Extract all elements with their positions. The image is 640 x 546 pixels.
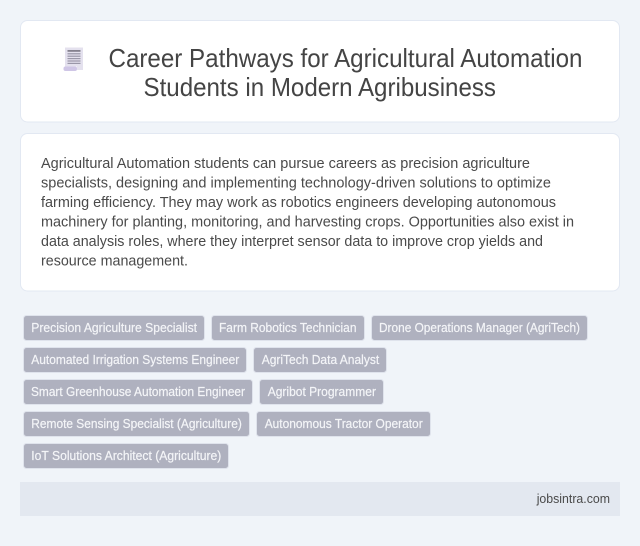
title: Career Pathways for Agricultural Automation bbox=[108, 43, 582, 73]
tag: Autonomous Tractor Operator: Autonomous Tractor Operator bbox=[265, 416, 423, 431]
tag: Drone Operations Manager (AgriTech): Drone Operations Manager (AgriTech) bbox=[379, 320, 580, 335]
footer: jobsintra.com bbox=[536, 491, 610, 506]
tag: IoT Solutions Architect (Agriculture): IoT Solutions Architect (Agriculture) bbox=[31, 448, 221, 463]
text block: description: specialists, designing and implementing technology-driven solutions to optimize bbox=[41, 174, 551, 192]
tag: Precision Agriculture Specialist bbox=[24, 316, 204, 340]
tag: Drone Operations Manager (AgriTech) bbox=[372, 316, 588, 340]
tag: Smart Greenhouse Automation Engineer bbox=[24, 380, 252, 404]
tag: Remote Sensing Specialist (Agriculture) bbox=[24, 412, 250, 436]
tag: Remote Sensing Specialist (Agriculture): Remote Sensing Specialist (Agriculture) bbox=[31, 416, 242, 431]
title bbox=[108, 43, 582, 102]
tag: Agribot Programmer: Agribot Programmer bbox=[268, 384, 377, 399]
tag: Precision Agriculture Specialist: Precision Agriculture Specialist bbox=[31, 320, 197, 335]
tag: IoT Solutions Architect (Agriculture) bbox=[24, 444, 228, 468]
footer bbox=[20, 482, 620, 516]
title: Students in Modern Agribusiness bbox=[144, 72, 496, 102]
text block: description: farming efficiency. They may work as robotics engineers developing autonomous bbox=[41, 194, 556, 211]
tag: Autonomous Tractor Operator bbox=[256, 412, 430, 436]
tag: AgriTech Data Analyst bbox=[254, 348, 386, 372]
text block: description: machinery for planting, monitoring, and harvesting crops. Opportunities also exist in bbox=[41, 214, 574, 230]
text block: description: Agricultural Automation students can pursue careers as precision agriculture bbox=[41, 155, 530, 172]
icon: document scroll bbox=[64, 48, 83, 71]
tag: Farm Robotics Technician: Farm Robotics Technician bbox=[219, 320, 356, 335]
tag: Automated Irrigation Systems Engineer bbox=[24, 348, 246, 372]
text block: description bbox=[41, 155, 574, 270]
tag: Farm Robotics Technician bbox=[212, 316, 364, 340]
tag: AgriTech Data Analyst: AgriTech Data Analyst bbox=[262, 352, 380, 367]
panel: career tags bbox=[24, 316, 588, 468]
text block: description: data analysis roles, where they interpret sensor data to improve crop yields and bbox=[41, 233, 543, 250]
panel: intro paragraph bbox=[20, 134, 620, 291]
tag: Smart Greenhouse Automation Engineer: Smart Greenhouse Automation Engineer bbox=[31, 384, 246, 399]
text block: description: resource management. bbox=[41, 252, 188, 270]
tag: Automated Irrigation Systems Engineer: Automated Irrigation Systems Engineer bbox=[31, 352, 240, 367]
panel: header bbox=[20, 20, 620, 122]
tag: Agribot Programmer bbox=[260, 380, 384, 404]
